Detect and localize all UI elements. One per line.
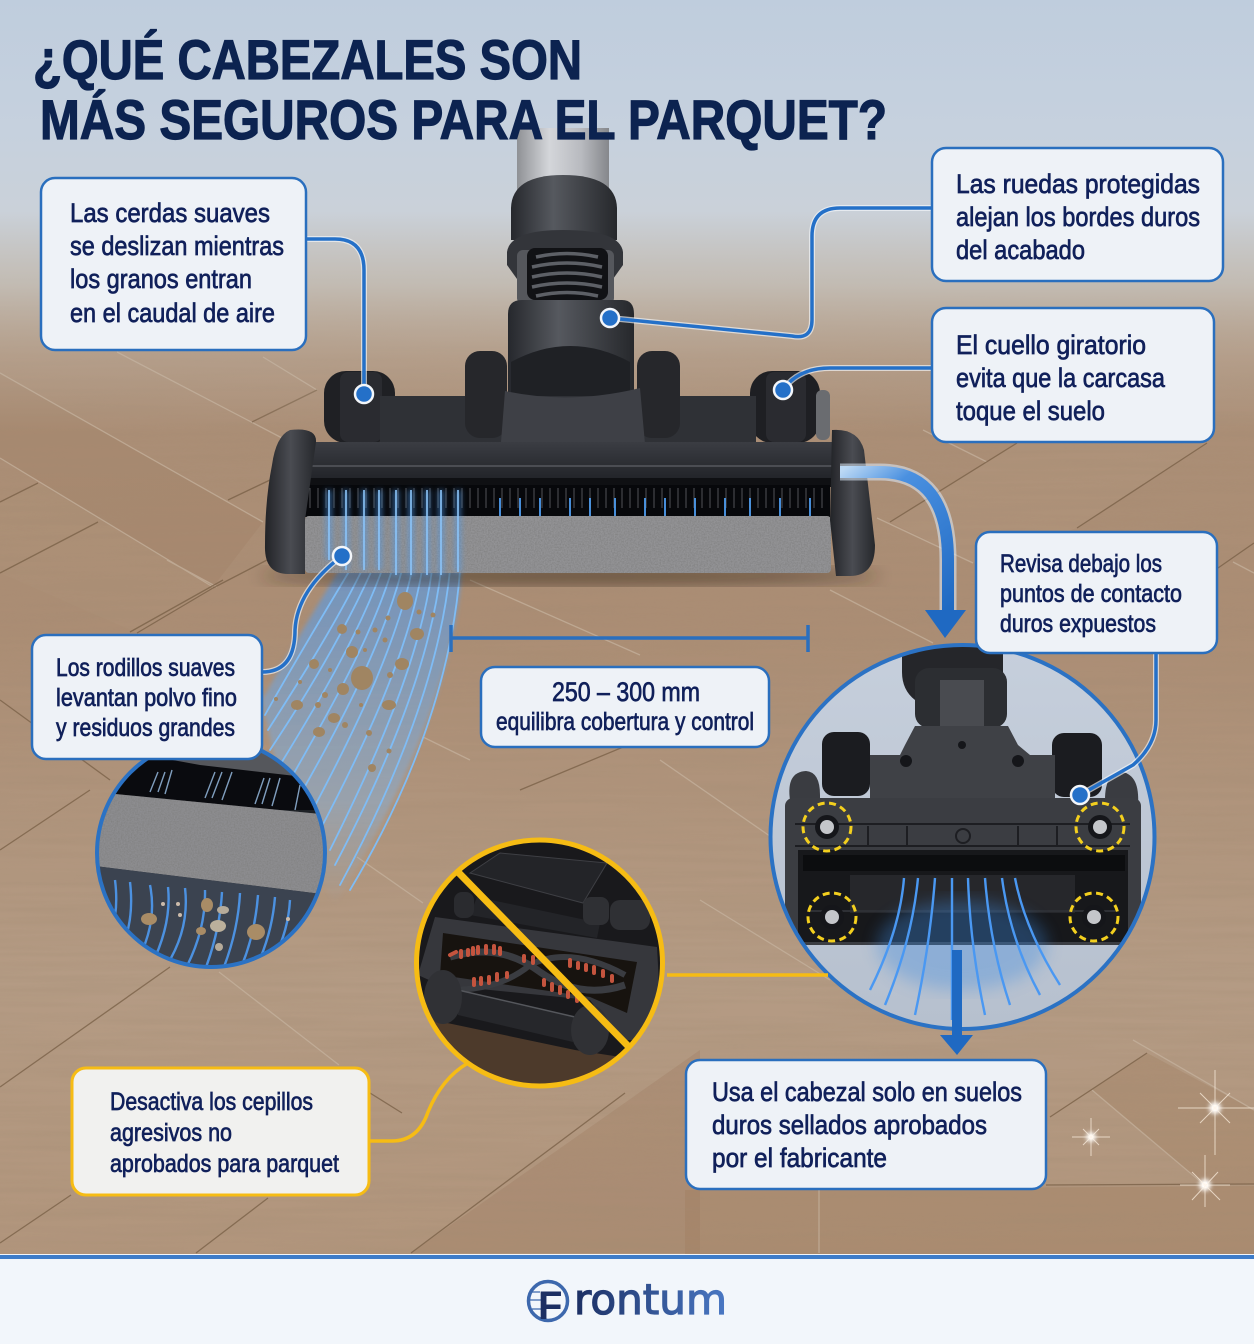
bellows (517, 250, 614, 304)
detail circle: aggressive brush, crossed out (415, 840, 662, 1100)
bristles (305, 485, 830, 517)
title: MÁS SEGUROS PARA EL PARQUET? (40, 88, 887, 151)
underside blue flow (870, 878, 1060, 1020)
callout: sealed hard floors: por el fabricante (712, 1143, 887, 1173)
connector: protected wheels (601, 208, 931, 337)
title: ¿QUÉ CABEZALES SON (33, 28, 582, 91)
soft shadow (260, 567, 880, 585)
connector: hard contact points (1071, 653, 1156, 804)
front bar (305, 442, 837, 479)
inner wheels (465, 351, 507, 438)
plate grooves (795, 824, 1130, 846)
tube (517, 128, 609, 194)
wheels (822, 732, 870, 796)
callout: sealed hard floors: Usa el cabezal solo en suelos (712, 1077, 1022, 1107)
callout: hard contact points: Revisa debajo los (1000, 550, 1162, 578)
callout: soft rollers: levantan polvo fino (56, 684, 237, 712)
callout: swivel neck (932, 308, 1214, 442)
callout: protected wheels: alejan los bordes duros (956, 202, 1200, 232)
callout: sealed hard floors (686, 1060, 1046, 1189)
callout: soft rollers: y residuos grandes (56, 714, 235, 742)
roller (305, 516, 831, 573)
detail circle: underside with contact points (770, 645, 1154, 1029)
footer band (0, 1254, 1254, 1344)
centre block (500, 388, 646, 455)
neck collar (511, 175, 617, 240)
body (870, 726, 1055, 800)
airflow and debris trail (262, 568, 462, 905)
callout: soft rollers (32, 635, 262, 759)
callout: soft bristles (41, 178, 306, 350)
callout: swivel neck: El cuello giratorio (956, 330, 1146, 360)
vacuum head (260, 128, 880, 585)
callout: width: 250 – 300 mm (552, 677, 700, 707)
callout: width (481, 667, 769, 747)
callout: protected wheels (932, 148, 1223, 281)
callout: swivel neck: evita que la carcasa (956, 363, 1166, 393)
arrow: head to underside detail (840, 472, 966, 638)
main body (380, 396, 756, 446)
detail circle: soft roller (90, 739, 330, 975)
callout: soft bristles: los granos entran (70, 264, 252, 294)
callout: width: equilibra cobertura y control (496, 708, 754, 736)
screws (803, 803, 1124, 941)
callout: soft bristles: Las cerdas suaves (70, 198, 270, 228)
icon: sparkles on the floor (1072, 1070, 1254, 1207)
callout: disable aggressive brushes (72, 1068, 369, 1195)
callout: hard contact points: duros expuestos (1000, 610, 1156, 638)
callout: protected wheels: del acabado (956, 235, 1085, 265)
callout: soft bristles: en el caudal de aire (70, 298, 275, 328)
callout: soft bristles: se deslizan mientras (70, 231, 284, 261)
blue airflow over roller (329, 490, 810, 575)
logo: Frontum: F (538, 1284, 562, 1328)
callout: hard contact points (976, 532, 1217, 653)
slot (798, 850, 1128, 942)
callout: hard contact points: puntos de contacto (1000, 580, 1182, 608)
callout: soft rollers: Los rodillos suaves (56, 654, 235, 682)
connector: soft rollers (262, 547, 351, 672)
logo: Frontum: rontum (574, 1275, 727, 1324)
callout: disable aggressive brushes: aprobados para parquet (110, 1150, 339, 1178)
callout: disable aggressive brushes: Desactiva los cepillos (110, 1088, 313, 1116)
connector: soft bristles (306, 239, 373, 403)
prohibition strike (458, 872, 629, 1047)
callout: sealed hard floors: duros sellados aprobados (712, 1110, 987, 1140)
callout: protected wheels: Las ruedas protegidas (956, 169, 1200, 199)
callout: disable aggressive brushes: agresivos no (110, 1119, 232, 1147)
callout: swivel neck: toque el suelo (956, 396, 1105, 426)
dimension bracket (451, 625, 808, 652)
underside blue glow (877, 900, 1047, 990)
connector: swivel neck (774, 368, 931, 399)
connector: yellow disable brushes (369, 975, 828, 1141)
neck (902, 645, 1003, 700)
rear wheels (324, 371, 395, 443)
arrow: underside to note (940, 950, 973, 1055)
side caps (265, 430, 316, 574)
title (33, 28, 887, 151)
